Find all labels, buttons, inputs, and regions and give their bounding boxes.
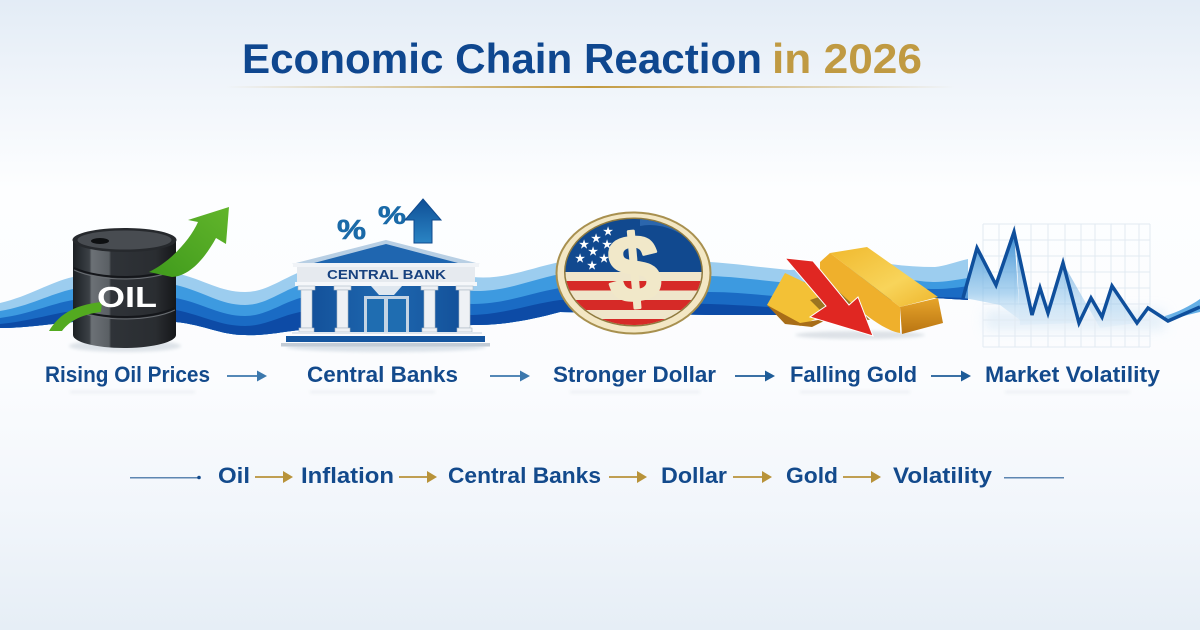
icon: gold bars with falling arrow (767, 247, 943, 339)
step labels row (45, 362, 1160, 387)
wave ribbon (0, 259, 1200, 335)
step labels row: Central Banks (307, 362, 458, 387)
chain summary row: Dollar (661, 463, 727, 488)
label underline shadows (70, 391, 1130, 393)
icon: green rising arrow (49, 302, 102, 331)
icon: dollar coin: ★ (579, 239, 589, 251)
icon: central bank: CENTRAL BANK (327, 267, 447, 282)
icon: central bank: % (378, 202, 406, 230)
icon: dollar coin: ★ (603, 226, 613, 238)
barrel label: OIL (97, 282, 157, 314)
title: in 2026 (772, 35, 922, 82)
chain summary row (130, 463, 1064, 488)
icon: dollar coin: ★ (587, 260, 597, 272)
icon: dollar coin: ★ (575, 253, 585, 265)
step labels row: Market Volatility (985, 362, 1160, 387)
icon: dollar coin: ★ (599, 253, 609, 265)
icon: oil barrel with rising arrow (49, 207, 229, 352)
chain summary row: Oil (218, 463, 250, 488)
step labels row: Falling Gold (790, 362, 917, 387)
dollar sign: $ (603, 214, 664, 323)
chart: market volatility (963, 224, 1200, 347)
icon: dollar coin (556, 212, 712, 334)
icon: dollar coin: ★ (602, 239, 612, 251)
icon: central bank (281, 199, 490, 352)
chain summary row: Inflation (301, 463, 394, 488)
chain summary row: Gold (786, 463, 838, 488)
chain summary row: Volatility (893, 463, 993, 488)
step labels row: Stronger Dollar (553, 362, 716, 387)
title: Economic Chain Reaction (242, 35, 762, 82)
step labels row: Rising Oil Prices (45, 362, 210, 387)
chain summary row: Central Banks (448, 463, 601, 488)
icon: red falling arrow (785, 258, 873, 336)
icon: dollar coin: ★ (591, 233, 601, 245)
step arrows (227, 370, 971, 382)
icon: up arrow (405, 199, 441, 243)
percent signs: % (337, 214, 366, 245)
icon: dollar coin: ★ (588, 246, 598, 258)
